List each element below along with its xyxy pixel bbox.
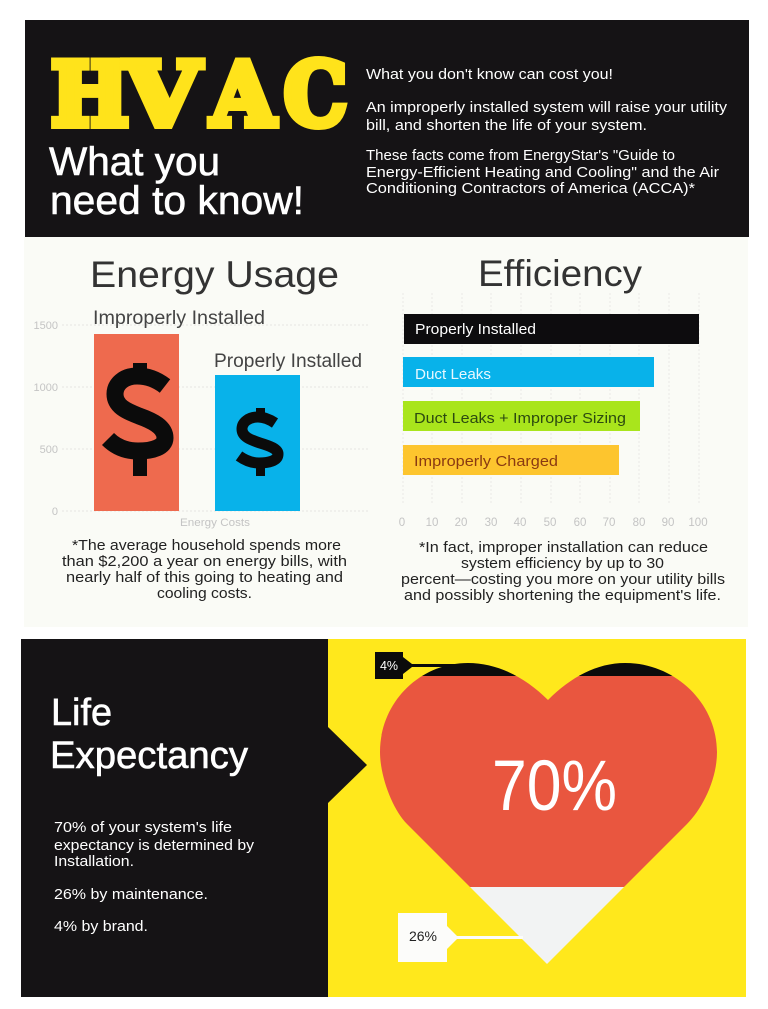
bar: duct leaks and improper sizing: Duct Leaks + Improper Sizing — [414, 410, 626, 427]
icon: large dollar sign — [108, 363, 165, 476]
value: 70%: 70% — [492, 747, 617, 826]
header intro text: What you don't know can cost you! — [366, 66, 613, 83]
panel: life expectancy — [21, 639, 746, 997]
life expectancy text: Installation. — [54, 854, 134, 870]
axis numbers: 100 — [688, 517, 708, 529]
bar chart: energy usage — [34, 308, 368, 529]
heading: Life Expectancy: Expectancy — [50, 735, 248, 777]
efficiency note: system efficiency by up to 30 — [461, 556, 664, 572]
axis numbers: 10 — [426, 517, 438, 529]
axis numbers: 30 — [485, 517, 497, 529]
energy usage note: nearly half of this going to heating and — [66, 570, 343, 586]
header intro text: Conditioning Contractors of America (ACCA)* — [366, 180, 695, 197]
bar chart: efficiency — [399, 293, 708, 529]
axis numbers: 70 — [603, 517, 615, 529]
black side panel with arrow — [21, 639, 367, 997]
life expectancy text: 70% of your system's life — [54, 820, 232, 836]
efficiency note — [401, 540, 725, 604]
bar label: improperly installed: Improperly Installed — [93, 308, 265, 329]
callout: 26%: 26% — [409, 928, 437, 944]
subtitle: need to know! — [50, 179, 304, 223]
energy usage note — [62, 538, 347, 602]
title: HVAC: C — [284, 43, 347, 146]
bar: improperly charged — [403, 445, 619, 475]
bar chart: energy usage: 0 — [52, 506, 58, 518]
icon: small dollar sign — [239, 408, 278, 476]
heading: Energy Usage: Energy Usage — [90, 254, 339, 295]
life expectancy text — [54, 820, 255, 935]
heart segment: maintenance — [470, 887, 624, 964]
heart segment: installation — [370, 676, 730, 887]
bar chart: energy usage: 1500 — [34, 320, 58, 332]
axis numbers: 80 — [633, 517, 645, 529]
axis numbers: 0 — [399, 517, 405, 529]
axis numbers: 40 — [514, 517, 526, 529]
life expectancy text: 4% by brand. — [54, 919, 148, 935]
axis numbers: 60 — [574, 517, 586, 529]
bar: duct leaks: Duct Leaks — [415, 366, 491, 383]
header intro text: bill, and shorten the life of your system. — [366, 117, 647, 134]
heading: Life Expectancy — [50, 692, 248, 777]
energy usage note: *The average household spends more — [72, 538, 341, 554]
header intro text — [366, 66, 728, 197]
life expectancy text: expectancy is determined by — [54, 838, 255, 854]
bar: properly installed: Properly Installed — [415, 321, 536, 338]
bar: improperly charged: Improperly Charged — [414, 453, 558, 470]
heading: Life Expectancy: Life — [51, 692, 112, 734]
efficiency note: and possibly shortening the equipment's life. — [404, 588, 721, 604]
heading: Efficiency: Efficiency — [478, 253, 643, 294]
bar: duct leaks — [403, 357, 654, 387]
bar chart: energy usage: 1000 — [34, 382, 58, 394]
callout: 26% — [398, 913, 523, 962]
axis label: Energy Costs — [180, 517, 251, 529]
bar: improperly installed — [94, 334, 179, 511]
bar: duct leaks and improper sizing — [403, 401, 640, 431]
header intro text: An improperly installed system will raise your utility — [366, 99, 728, 116]
bar chart: energy usage: 500 — [40, 444, 58, 456]
heart segment: brand — [422, 663, 672, 676]
header intro text: Energy-Efficient Heating and Cooling" and the Air — [366, 164, 719, 181]
subtitle — [49, 140, 304, 223]
energy usage note: than $2,200 a year on energy bills, with — [62, 554, 347, 570]
header intro text: These facts come from EnergyStar's "Guide to — [366, 147, 675, 164]
title: HVAC — [51, 43, 347, 146]
efficiency note: *In fact, improper installation can reduce — [419, 540, 708, 556]
panel: charts — [24, 237, 748, 627]
subtitle: What you — [49, 140, 220, 184]
life expectancy text: 26% by maintenance. — [54, 887, 208, 903]
title: HVAC: H — [51, 43, 129, 146]
callout: 4% — [375, 652, 455, 679]
axis numbers: 50 — [544, 517, 556, 529]
axis numbers: 20 — [455, 517, 467, 529]
title: HVAC: V — [124, 43, 202, 146]
bar: properly installed — [215, 375, 300, 511]
axis numbers — [399, 517, 708, 529]
title: HVAC: A — [210, 43, 276, 146]
bar: properly installed — [404, 314, 699, 344]
callout: 4%: 4% — [380, 659, 398, 673]
axis numbers: 90 — [662, 517, 674, 529]
heart chart — [370, 655, 730, 967]
bar label: properly installed: Properly Installed — [214, 351, 362, 372]
panel: header — [25, 20, 749, 237]
energy usage note: cooling costs. — [157, 586, 252, 602]
efficiency note: percent—costing you more on your utility bills — [401, 572, 725, 588]
